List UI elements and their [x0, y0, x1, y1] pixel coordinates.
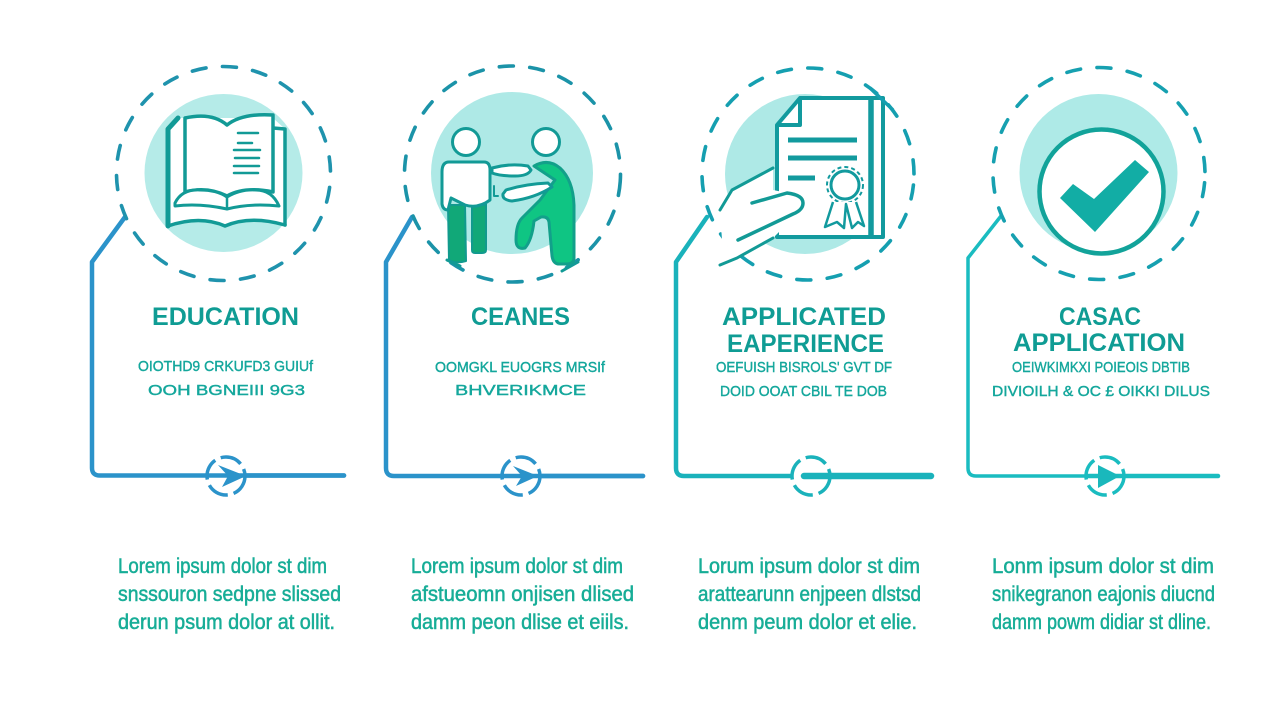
icon: hand holding certificate: [720, 88, 893, 265]
subtext: DIVIOILH & OC £ OIKKI DILUS: [992, 383, 1210, 400]
subtext: [992, 359, 1210, 400]
description: damm powm didiar st dline.: [992, 611, 1211, 634]
subtext: [716, 359, 892, 400]
description: [698, 555, 921, 634]
description: afstueomn onjisen dlised: [411, 583, 634, 606]
description: [411, 555, 634, 634]
icon: two people shaking hands: [442, 128, 578, 271]
icon: arrow node: [1086, 457, 1218, 495]
heading: EDUCATION: [152, 303, 299, 331]
description: snikegranon eajonis diucnd: [992, 583, 1215, 606]
subtext: OEFUISH BISROLS' GVT DF: [716, 359, 892, 376]
subtext: OEIWKIMKXI POIEOIS DBTIB: [1012, 359, 1190, 376]
connector line: [968, 216, 1218, 476]
panel: casac application: [968, 59, 1218, 634]
heading: [722, 303, 886, 358]
pale circle: [431, 92, 593, 254]
description: damm peon dlise et eiils.: [411, 611, 629, 634]
pale circle: [725, 94, 885, 254]
icon: arrow node: [502, 457, 643, 495]
description: arattearunn enjpeen dlstsd: [698, 583, 921, 606]
subtext: [138, 358, 314, 399]
heading: [1013, 303, 1185, 357]
connector line: [676, 217, 790, 476]
subtext: DOID OOAT CBIL TE DOB: [720, 383, 887, 400]
icon: check mark in ring: [1040, 130, 1164, 254]
description: Lorem ipsum dolor st dim: [118, 555, 327, 578]
panel: applicated experience: [676, 58, 931, 634]
heading: APPLICATION: [1013, 329, 1185, 357]
description: Lonm ipsum dolor st dim: [992, 555, 1214, 578]
description: Lorem ipsum dolor st dim: [411, 555, 623, 578]
heading: CEANES: [471, 303, 570, 331]
subtext: BHVERIKMCE: [455, 382, 586, 399]
dashed ring: [397, 59, 628, 289]
description: snssouron sedpne slissed: [118, 583, 341, 606]
pale circle: [1020, 94, 1178, 252]
icon: arrow node: [207, 457, 344, 495]
dashed ring: [692, 58, 924, 290]
icon: seal: [825, 167, 864, 228]
description: denm peum dolor et elie.: [698, 611, 917, 634]
subtext: OOH BGNEIII 9G3: [148, 382, 305, 399]
heading: CASAC: [1059, 303, 1141, 331]
heading: APPLICATED: [722, 303, 886, 331]
dashed ring: [984, 59, 1214, 288]
description: Lorum ipsum dolor st dim: [698, 555, 920, 578]
description: [118, 555, 341, 634]
subtext: [435, 359, 606, 399]
connector line: [386, 217, 643, 476]
heading: EAPERIENCE: [727, 330, 884, 358]
subtext: OIOTHD9 CRKUFD3 GUIUf: [138, 358, 314, 375]
subtext: OOMGKL EUOGRS MRSIf: [435, 359, 606, 376]
icon: open book: [168, 115, 285, 226]
connector line: [92, 217, 344, 476]
icon: arrow node: [792, 457, 931, 495]
description: derun psum dolor at ollit.: [118, 611, 335, 634]
panel: education: [92, 53, 344, 634]
panel: ceanes: [386, 59, 643, 634]
description: [992, 555, 1215, 634]
pale circle: [144, 94, 302, 252]
dashed ring: [103, 53, 344, 294]
